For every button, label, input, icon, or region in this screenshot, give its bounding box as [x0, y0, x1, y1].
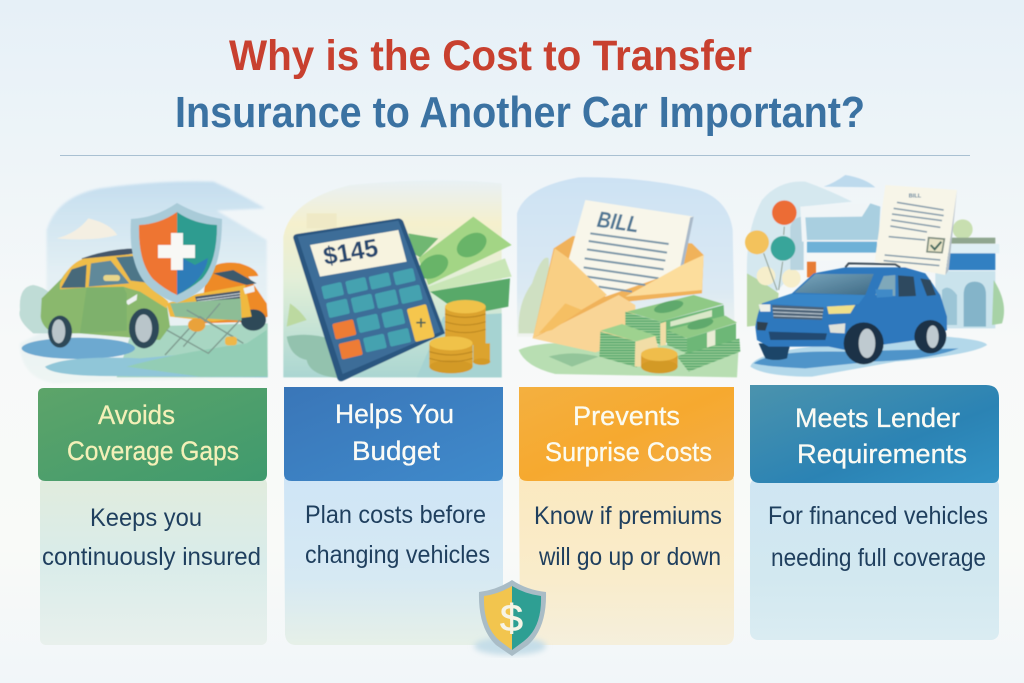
text: meets body: For financed vehicles	[768, 502, 988, 530]
text: helps body: Plan costs before	[305, 501, 486, 529]
text: meets body: needing full coverage	[771, 544, 986, 572]
panel: helps you budget	[283, 180, 512, 645]
icon: dollar shield: $	[500, 598, 523, 640]
header: meets: Meets Lender	[795, 403, 960, 433]
coins	[641, 355, 678, 367]
header: prevents: Surprise Costs	[545, 437, 712, 467]
icon: dollar shield	[474, 580, 546, 656]
text: avoids body: Keeps you	[90, 504, 202, 532]
header: helps: Budget	[352, 436, 441, 466]
body card	[284, 478, 503, 645]
illustration: suv at dealership: BILL	[909, 193, 922, 199]
title: Insurance to Another Car Important?	[175, 88, 865, 137]
title	[175, 32, 865, 137]
text: avoids body: continuously insured	[42, 543, 261, 571]
header: avoids	[38, 388, 267, 481]
illustration: calculator and money: $145	[321, 234, 380, 271]
coins	[473, 343, 490, 362]
folding chair	[170, 298, 242, 321]
bill	[569, 200, 694, 297]
money stacks	[625, 312, 660, 345]
panel: prevents surprise costs	[517, 177, 740, 645]
header: avoids: Coverage Gaps	[67, 436, 239, 466]
header: prevents: Prevents	[573, 401, 680, 431]
text: avoids body	[42, 504, 261, 571]
header: meets: Requirements	[797, 439, 967, 469]
text: helps body: changing vehicles	[305, 541, 490, 569]
panel: avoids coverage gaps	[19, 181, 268, 645]
panel: meets lender requirements	[745, 175, 1004, 640]
ground	[750, 337, 987, 377]
green car	[41, 255, 170, 340]
car front	[167, 285, 252, 322]
text: helps body	[305, 501, 490, 569]
wheels	[48, 316, 72, 348]
calculator	[293, 218, 445, 381]
header: prevents	[519, 387, 734, 481]
text: prevents body: will go up or down	[538, 543, 721, 571]
header: meets	[750, 385, 999, 483]
header: helps: Helps You	[335, 399, 454, 429]
header: helps	[284, 387, 503, 481]
body card	[750, 478, 999, 640]
text: prevents body: Know if premiums	[534, 502, 722, 530]
building	[790, 217, 804, 270]
icon: shield with cross	[131, 203, 222, 303]
illustration: bill in envelope with money	[517, 177, 740, 377]
body card	[40, 478, 267, 645]
envelope back	[533, 236, 704, 338]
document	[875, 185, 957, 275]
rear body orange	[200, 262, 268, 323]
money	[408, 233, 438, 257]
title: Why is the Cost to Transfer	[229, 32, 752, 80]
body card	[519, 478, 734, 645]
text: meets body	[768, 502, 988, 572]
suv	[759, 343, 790, 360]
text: prevents body	[534, 502, 722, 571]
envelope flaps	[533, 248, 607, 338]
header: avoids: Avoids	[98, 400, 175, 430]
illustration: calculator and money	[283, 180, 512, 381]
illustration: suv at dealership	[745, 175, 1004, 377]
illustration: car with shield	[19, 181, 268, 383]
balloons	[764, 227, 784, 290]
illustration: bill in envelope with money: BILL	[596, 206, 641, 237]
